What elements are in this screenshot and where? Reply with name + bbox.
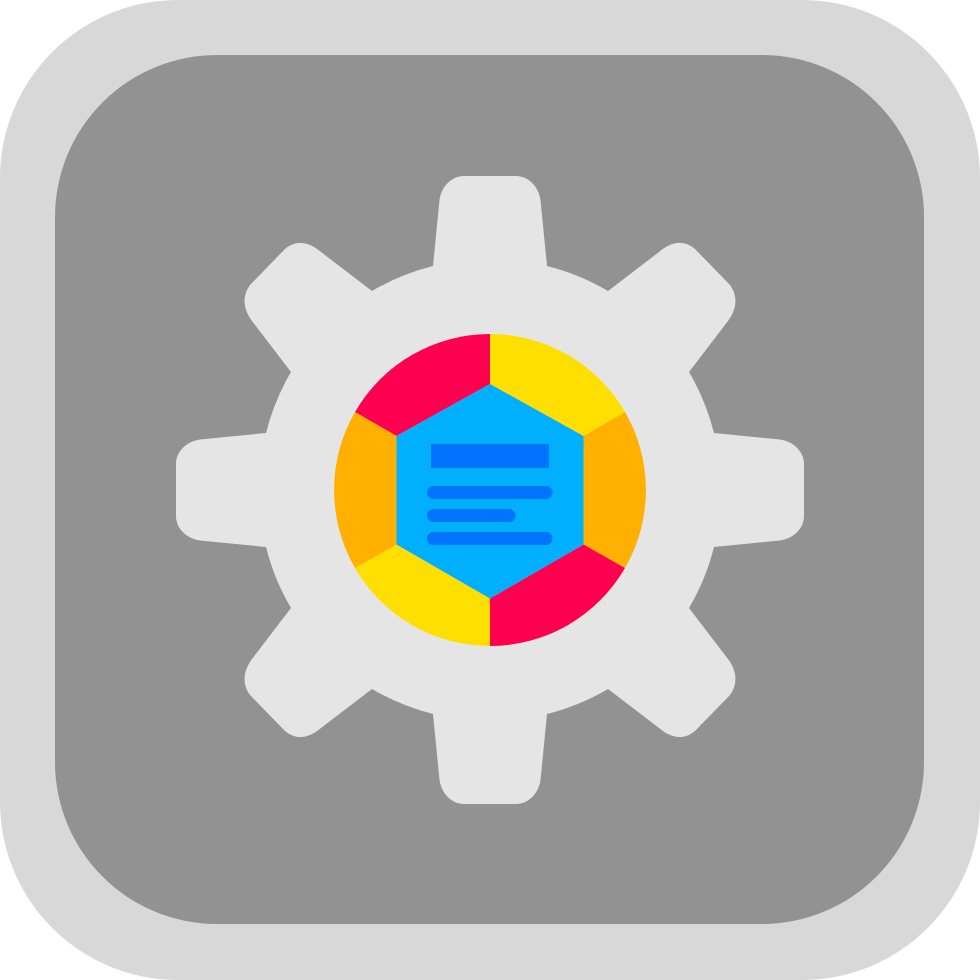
wheel segment: orange right — [584, 412, 646, 568]
gear — [176, 176, 804, 804]
document lines — [427, 444, 552, 545]
wheel segment: yellow top right — [490, 334, 625, 436]
wheel segment: red bottom right — [490, 544, 625, 646]
heading bar — [431, 444, 549, 468]
wheel segment: red top left — [355, 334, 490, 436]
wheel segment: yellow bottom left — [355, 544, 490, 646]
text line 2 — [427, 509, 516, 522]
blue hexagon — [396, 384, 584, 598]
text line 1 — [427, 486, 552, 499]
text line 3 — [427, 532, 552, 545]
colour wheel — [334, 334, 646, 646]
inner grey panel — [55, 55, 924, 924]
wheel segment: orange left — [334, 412, 396, 568]
